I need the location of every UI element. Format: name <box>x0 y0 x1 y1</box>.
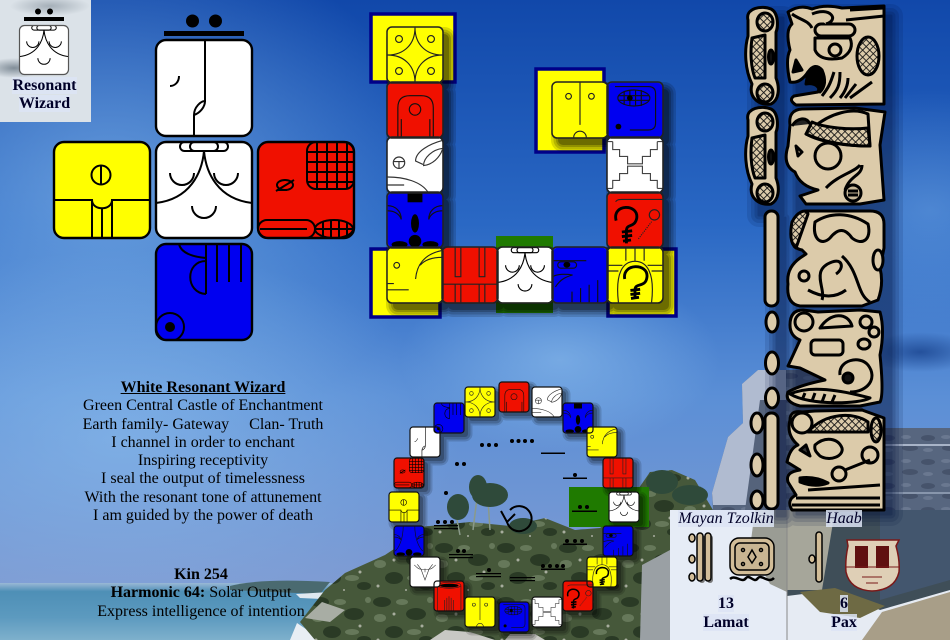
ring seal warrior <box>587 557 617 587</box>
seal 1 <box>388 28 442 82</box>
text block: kin description: Earth family- Gateway Clan- Truth <box>83 416 323 433</box>
haab tone 6 <box>809 532 822 582</box>
text block: kin description: With the resonant tone of attunement <box>84 489 322 506</box>
ring tile borders <box>389 382 639 632</box>
label: 13 Lamat: 13 <box>718 595 734 612</box>
ring seal earth <box>563 581 593 611</box>
text block: kin description: I am guided by the power of death <box>93 507 313 524</box>
tone mark <box>164 14 244 36</box>
seal: antipode <box>258 142 354 238</box>
ocean <box>0 583 360 640</box>
label: 6 Pax: 6 <box>840 595 848 612</box>
tone 12 <box>449 549 473 558</box>
heading: Resonant Wizard <box>12 77 77 112</box>
glyph: bird head <box>788 6 884 105</box>
heading: Resonant Wizard: Wizard <box>19 95 70 112</box>
seal 5 <box>388 248 442 302</box>
ring seal dragon <box>434 581 464 611</box>
ring seal star <box>465 387 495 417</box>
glyph: long snout head <box>787 410 884 510</box>
text block: kin number and harmonic: Harmonic 64: Solar Output <box>111 584 291 601</box>
seal 11 <box>608 138 662 192</box>
island vegetation <box>300 470 713 640</box>
wavespell tiles <box>388 28 662 302</box>
seal: destiny <box>156 142 252 238</box>
glyph: narrow ornament lower <box>746 107 778 204</box>
ring seal storm <box>499 602 529 632</box>
glyph: lower bar and dots <box>751 413 778 509</box>
text block: kin description: Green Central Castle of Enchantment <box>83 397 323 414</box>
destiny green highlight <box>496 236 553 313</box>
tone 7 <box>572 505 597 512</box>
tzolkin day sign Lamat <box>730 538 774 580</box>
tone 11 <box>476 568 501 577</box>
ring seal monkey <box>563 403 593 433</box>
text block: kin number and harmonic: Express intelligence of intention <box>97 603 305 620</box>
seal ring <box>389 382 639 632</box>
ring seal mirror <box>532 597 562 627</box>
glyph: bar five <box>765 211 778 306</box>
tone 2 <box>455 462 466 466</box>
ring tile shadows <box>393 386 643 636</box>
label: 13 Lamat: Lamat <box>703 614 749 631</box>
tone 1 <box>444 491 448 495</box>
wavespell highlight squares <box>371 14 676 317</box>
ring seal serpent <box>394 458 424 488</box>
tone 8 <box>563 539 587 545</box>
tone 6 <box>563 473 587 479</box>
tone 13 <box>434 520 458 529</box>
label: Haab: Haab <box>826 510 862 527</box>
glyph column shadow <box>759 16 891 516</box>
ring seal sun <box>465 597 495 627</box>
tone 5 <box>541 452 565 454</box>
coastal rocks <box>305 550 670 640</box>
ring seal eagle <box>603 526 633 556</box>
seal 8 <box>553 248 607 302</box>
ring seal dog <box>532 387 562 417</box>
seal: guide <box>156 40 252 136</box>
text block: kin description: I seal the output of timelessness <box>101 470 305 487</box>
ring seal wind <box>410 557 440 587</box>
wavespell tile borders <box>387 27 663 303</box>
seal 12 <box>608 83 662 137</box>
text block: kin description <box>83 379 324 524</box>
label: 6 Pax <box>831 595 857 631</box>
oracle cross <box>54 14 354 341</box>
heading: Resonant Wizard: Resonant <box>12 77 76 94</box>
ring seal worldbridger <box>410 427 440 457</box>
ring seal wizard <box>609 492 639 522</box>
icon: small resonant wizard seal with tone <box>20 8 68 74</box>
ring seal seed <box>389 492 419 522</box>
label: Mayan Tzolkin: Mayan Tzolkin <box>678 510 774 527</box>
text block: kin description: I channel in order to enchant <box>111 434 295 451</box>
arrow: counterclockwise circular arrow <box>501 506 532 531</box>
ring seal night <box>394 526 424 556</box>
glyph: dots <box>766 312 778 408</box>
seal 7 <box>498 248 552 302</box>
text block: kin description: White Resonant Wizard <box>121 379 285 396</box>
seal: occult <box>156 244 252 341</box>
seal 4 <box>388 193 442 248</box>
tone 3 <box>480 443 498 447</box>
ring seal human <box>587 427 617 457</box>
text block: kin description: Inspiring receptivity <box>138 452 268 469</box>
seal 6 <box>443 248 497 302</box>
tzolkin tone 13 <box>689 533 713 583</box>
ring seal hand <box>434 403 464 433</box>
palm trees <box>447 470 708 535</box>
label: 6 Pax: Pax <box>831 614 857 631</box>
seal 9 <box>608 248 662 302</box>
ring seal moon <box>499 382 529 412</box>
seal 13 <box>553 83 607 137</box>
tone 10 <box>510 577 535 581</box>
wavespell tile shadows <box>393 34 669 310</box>
panel: name box backdrop <box>0 0 91 122</box>
text block: kin number and harmonic <box>97 566 305 620</box>
tone 4 <box>510 439 534 443</box>
label: 13 Lamat <box>703 595 749 631</box>
glyph: mask <box>788 211 884 306</box>
ring seal skywalker <box>603 458 633 488</box>
ring tone numbers <box>434 439 597 581</box>
glyph: narrow ornament upper <box>746 7 778 104</box>
glyph: head with scroll <box>787 310 882 406</box>
seal 2 <box>388 83 442 137</box>
Tzolkin and Haab glyphs <box>689 532 822 583</box>
Mayan glyph column <box>746 6 885 510</box>
ring green highlight <box>569 487 649 527</box>
tone 9 <box>541 564 565 570</box>
seal: analog <box>54 142 150 238</box>
haab month sign Pax <box>846 540 899 591</box>
glyph: turtle head <box>786 108 885 204</box>
panel: Tzolkin and Haab photo backdrop <box>670 510 950 640</box>
text block: kin number and harmonic: Kin 254 <box>174 566 228 583</box>
seal 3 <box>388 138 442 192</box>
seal 10 <box>608 193 662 247</box>
temple ruin <box>680 370 950 640</box>
